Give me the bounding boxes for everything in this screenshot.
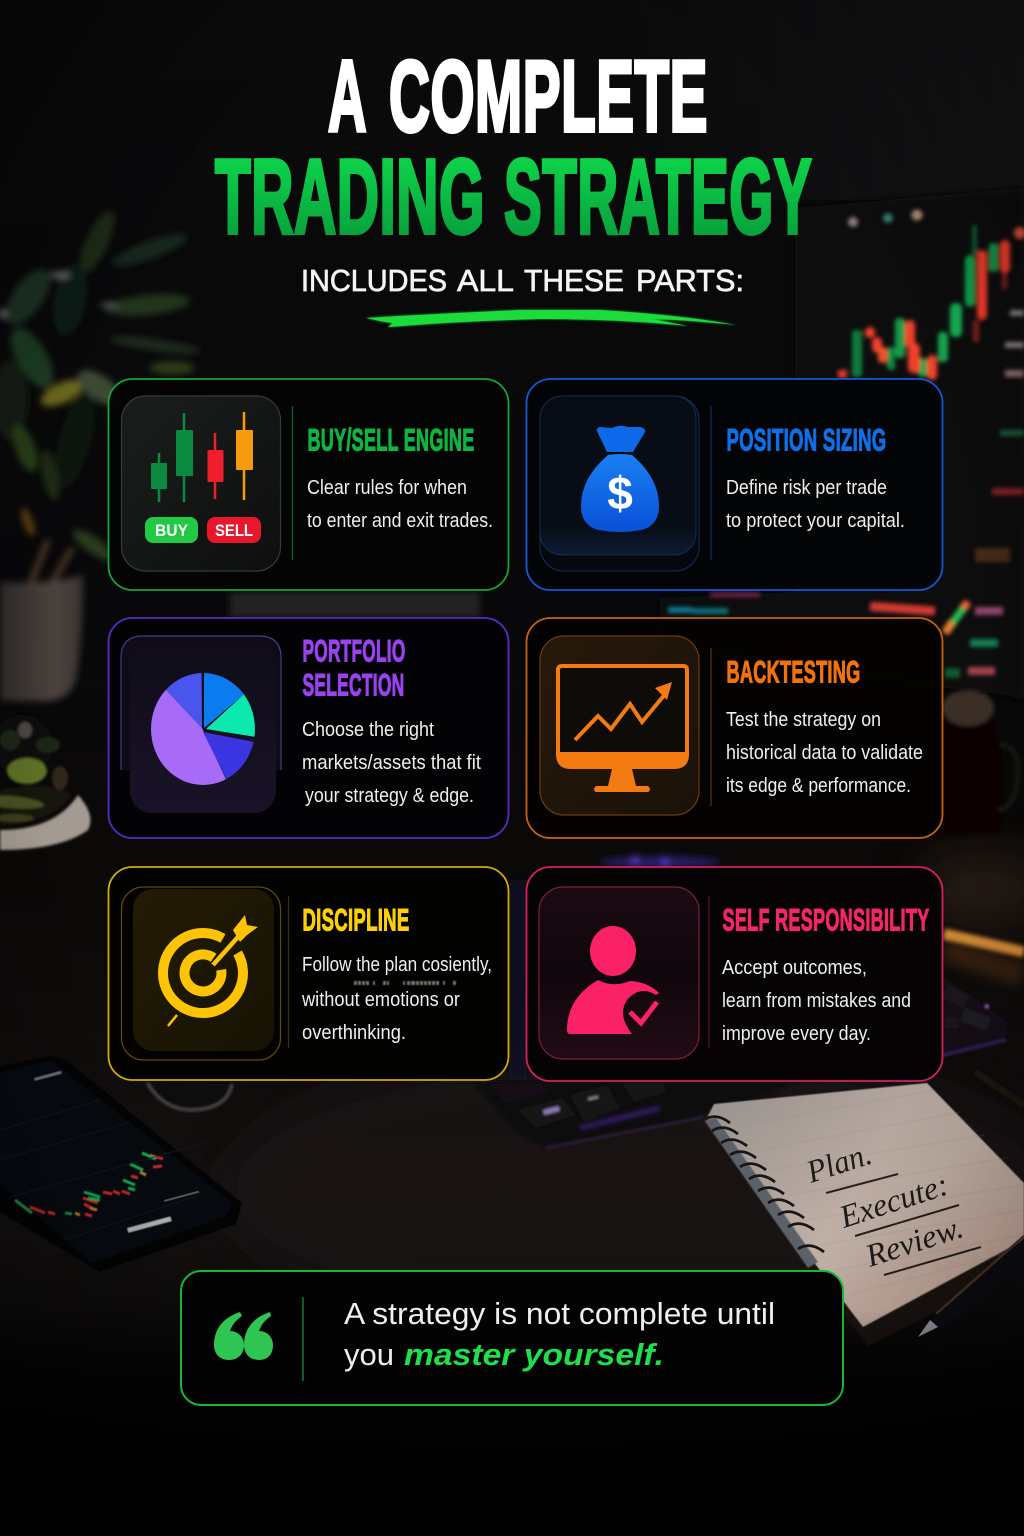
text: quote bbox=[344, 1296, 775, 1372]
small succulent in a dish bbox=[0, 715, 90, 850]
heading: portfolio selection: PORTFOLIO bbox=[302, 632, 406, 668]
icon: candlesticks with buy and sell buttons: SELL bbox=[215, 521, 253, 540]
icon: monitor with rising chart bbox=[540, 636, 699, 815]
right side of keyboard bbox=[940, 975, 1008, 1058]
glowing LED desk strip bbox=[944, 934, 1024, 975]
title line: A COMPLETE: A bbox=[328, 41, 367, 153]
text: portfolio description bbox=[302, 719, 481, 807]
plant with leaves and pot bbox=[0, 207, 201, 701]
callout: quote bbox=[181, 1271, 843, 1405]
icon: money bag: $ bbox=[607, 467, 633, 519]
text: self responsibility description: improve every day. bbox=[722, 1023, 871, 1045]
text: position sizing description: Define risk per trade bbox=[726, 477, 887, 499]
subtitle: INCLUDES bbox=[301, 263, 447, 298]
text: portfolio description: your strategy & edge. bbox=[305, 785, 474, 807]
panel: self responsibility bbox=[526, 867, 942, 1081]
text: buy/sell description: Clear rules for when bbox=[307, 477, 467, 499]
heading: portfolio selection bbox=[302, 632, 406, 702]
text: quote: A strategy is not complete until bbox=[344, 1296, 775, 1331]
keyboard purple glow above the bottom cards bbox=[509, 856, 720, 1080]
heading: backtesting: BACKTESTING bbox=[726, 654, 860, 690]
handwriting: Execute: Execute: bbox=[834, 1166, 953, 1235]
desk item behind card bbox=[147, 1083, 232, 1110]
smartphone with chart bbox=[0, 1056, 242, 1272]
title line: TRADING STRATEGY: TRADING bbox=[215, 138, 485, 256]
icon: candlesticks with buy and sell buttons: BUY bbox=[155, 521, 189, 540]
keyboard bbox=[472, 975, 1008, 1148]
handwriting: Plan: Plan. bbox=[801, 1135, 876, 1190]
desk surface bbox=[220, 592, 1024, 1330]
spiral notebook with handwriting bbox=[698, 1083, 1024, 1346]
text: portfolio description: Choose the right bbox=[302, 719, 434, 741]
icon: target with arrow bbox=[122, 887, 280, 1060]
subtitle: ALL bbox=[457, 263, 514, 298]
heading: discipline: DISCIPLINE bbox=[302, 902, 410, 938]
icon: money bag bbox=[540, 396, 699, 571]
dark pen top right bbox=[975, 1072, 1024, 1105]
text: discipline description bbox=[301, 954, 492, 1044]
icon: pie chart bbox=[120, 635, 282, 813]
green brush underline bbox=[366, 310, 736, 327]
front of keyboard bbox=[472, 1081, 800, 1148]
panel: backtesting bbox=[526, 618, 942, 838]
text: position sizing description bbox=[726, 477, 905, 532]
text: backtesting description: Test the strategy on bbox=[726, 709, 881, 731]
icon: candlesticks with buy and sell buttons bbox=[122, 396, 280, 571]
pen bbox=[918, 1236, 1024, 1337]
text: self responsibility description: Accept outcomes, bbox=[722, 957, 867, 979]
title line: A COMPLETE bbox=[328, 41, 708, 153]
handwriting: Review: Review. bbox=[860, 1209, 967, 1274]
heading: portfolio selection: SELECTION bbox=[302, 666, 404, 702]
text: quote: master yourself. bbox=[404, 1337, 664, 1372]
text: backtesting description: its edge & performance. bbox=[726, 775, 911, 797]
text: backtesting description bbox=[726, 709, 923, 797]
text: buy/sell description bbox=[307, 477, 493, 532]
monitor with candlestick chart bbox=[660, 188, 1024, 700]
bottom fade bbox=[0, 1310, 1024, 1536]
panel: position sizing bbox=[526, 379, 942, 590]
text: self responsibility description: learn from mistakes and bbox=[722, 990, 911, 1012]
panel: buy/sell engine bbox=[108, 379, 508, 590]
text: discipline description: Follow the plan cosiently, bbox=[302, 954, 492, 976]
subtitle: THESE bbox=[524, 263, 624, 298]
coffee mug bbox=[942, 690, 1018, 835]
heading: buy/sell engine: BUY/SELL ENGINE bbox=[308, 422, 474, 458]
text: self responsibility description bbox=[722, 957, 911, 1045]
text: discipline description: without emotions or bbox=[301, 989, 460, 1011]
text: position sizing description: to protect your capital. bbox=[726, 510, 905, 532]
title bbox=[215, 41, 812, 256]
panel: portfolio selection bbox=[100, 600, 508, 838]
icon: quotation mark bbox=[214, 1312, 273, 1360]
icon: person with check mark bbox=[539, 887, 699, 1059]
title line: A COMPLETE: COMPLETE bbox=[389, 41, 708, 153]
text: backtesting description: historical data to validate bbox=[726, 742, 923, 764]
heading: position sizing: POSITION SIZING bbox=[726, 422, 886, 458]
text: discipline description: overthinking. bbox=[302, 1022, 406, 1044]
text: quote: you bbox=[344, 1337, 394, 1372]
subtitle: PARTS: bbox=[636, 263, 744, 298]
panel: discipline bbox=[108, 867, 508, 1080]
text: buy/sell description: to enter and exit trades. bbox=[307, 510, 493, 532]
subtitle bbox=[301, 263, 744, 298]
text: portfolio description: markets/assets that fit bbox=[302, 752, 481, 774]
